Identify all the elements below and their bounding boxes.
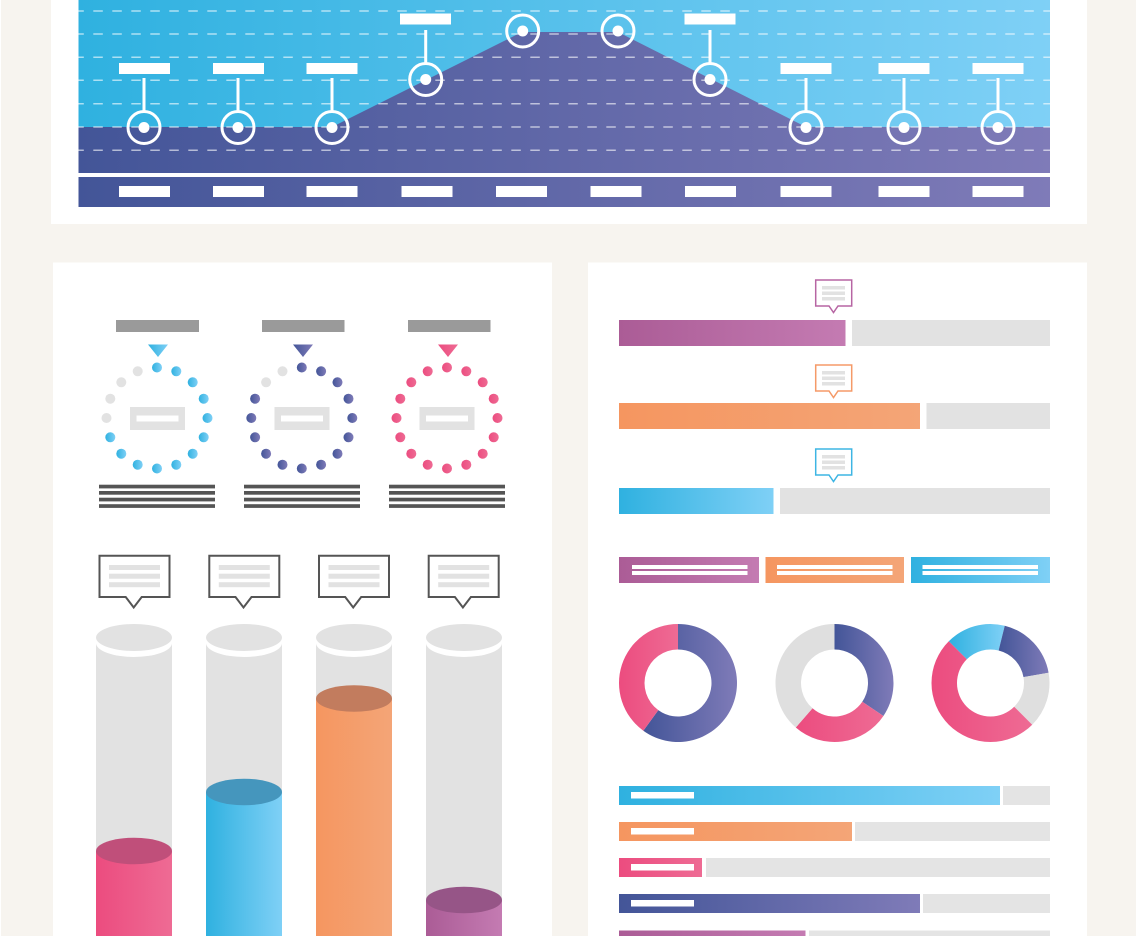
progress bar: orange [619, 365, 1050, 429]
x axis band with labels [78, 177, 1050, 207]
legend tabs [619, 557, 1050, 583]
area chart dark mountain shape [78, 32, 1050, 173]
chart markers with labels [119, 14, 1024, 144]
donut chart 2 [775, 624, 893, 742]
horizontal bar: navy [619, 894, 1050, 913]
callout [429, 556, 499, 608]
cylinder 1: pink [96, 556, 172, 936]
horizontal bar: orange [619, 822, 1050, 841]
donut chart 3 [931, 624, 1049, 742]
panel: left [53, 262, 552, 936]
horizontal bar: pink [619, 858, 1050, 877]
callout [319, 556, 389, 608]
callout [209, 556, 279, 608]
callout [816, 280, 852, 312]
cylinder 4: violet [426, 556, 502, 936]
callout [816, 449, 852, 482]
callout [816, 365, 852, 398]
area chart background [78, 0, 1050, 173]
callout [100, 556, 170, 608]
cylinder 2: blue [206, 556, 282, 936]
dot ring gauge: pink [389, 320, 505, 508]
horizontal bar: violet [619, 930, 1050, 936]
panel: right [588, 262, 1087, 936]
horizontal bar: blue [619, 786, 1050, 805]
progress bar: violet [619, 280, 1050, 346]
cylinder 3: orange [316, 556, 392, 936]
dot ring gauge: blue [99, 320, 215, 508]
panel: top area chart [51, 0, 1087, 224]
progress bar: blue [619, 449, 1050, 514]
dot ring gauge: navy [244, 320, 360, 508]
donut chart 1 [619, 624, 737, 742]
